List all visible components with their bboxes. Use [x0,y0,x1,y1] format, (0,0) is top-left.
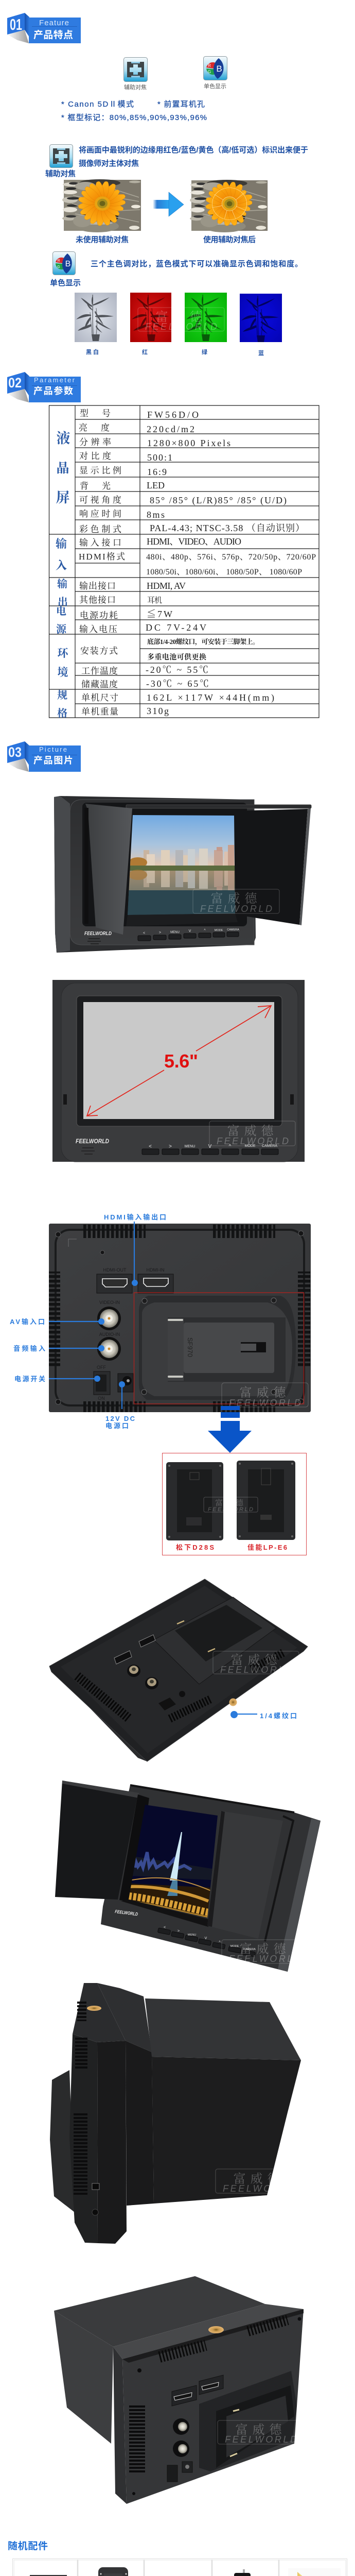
parameter names: 可视角度 [79,495,121,505]
parameter names: 显示比例 [79,466,121,476]
buttons [142,1149,278,1155]
photo: monitor with sunhood front view: FEELWORLD [84,931,112,937]
parameter values: 16:9 [147,467,167,477]
battery plate [199,2371,297,2471]
watermark: 富威德 [215,1498,246,1507]
icon: focus assist large [49,144,73,168]
watermark: FEELWORLD [229,1398,301,1408]
watermark: 富威德 [240,1942,290,1956]
parameter names: 单机重量 [81,707,118,717]
swatch labels [86,348,264,357]
tripod thread [208,2326,224,2333]
watermark [204,1497,258,1513]
icon: single colour large: B [65,260,70,268]
watermark: FEELWORLD [220,1665,292,1675]
single colour description: 三个主色调对比，蓝色模式下可以准确显示色调和饱和度。 [91,259,303,268]
BNC connectors [97,1300,121,1361]
watermark: FEELWORLD [145,321,217,332]
photo: monitor angled with sunhood open [55,1781,321,1972]
HDMI ports: HDMI-IN [146,1267,165,1273]
parameter names: 对比度 [79,451,111,461]
watermark: 富威德 [240,1386,290,1400]
group labels: 出 [58,596,68,608]
parameter values: DC 7V-24V [146,622,206,633]
HDMI ports: HDMI-OUT [103,1267,127,1273]
callout: HDMI input and output: HDMI输入输出口 [104,1213,166,1221]
photo: monitor with sunhood front view: MODE [215,929,223,932]
icon: single colour large [52,251,75,275]
parameter values: HDMI, AV [147,581,186,591]
swatch labels: 黑白 [86,348,99,355]
photo: monitor with sunhood front view: ^ [204,929,206,933]
watermark [218,2420,304,2445]
group labels: 源 [56,623,67,635]
parameter values: 162L ×117W ×44H(mm) [147,692,274,703]
parameter names: 其他接口 [79,595,116,605]
parameter values: 8ms [147,510,165,520]
callout: audio input [13,1345,104,1352]
icon: single colour display: B [216,64,222,74]
photo: before focus assist [62,179,141,232]
photo: monitor rear with annotated ports [49,1224,311,1412]
photo: monitor front with 5.6 inch diagonal: V [208,1144,212,1149]
group labels: 液 [57,431,70,446]
specification table [49,405,319,719]
photo: monitor rear with sunhood closed [54,2276,304,2504]
watermark [138,308,224,332]
focus assist description [79,145,308,168]
feature list: * Canon 5DⅡ模式 [61,100,134,109]
photo: monitor angled with sunhood open: V [205,1937,207,1940]
photo: monitor front with 5.6 inch diagonal: CAMERA [262,1144,277,1148]
rear ports [167,2375,223,2482]
icon label: single colour display: 单色显示 [204,82,226,90]
icon: single colour large: G [57,265,60,269]
arrow: screen diagonal [87,1006,271,1116]
watermark: 富威德 [211,892,261,906]
photo: monitor with sunhood front view [54,796,311,953]
power switch and DC jack: ON [98,1396,105,1401]
watermark: FEELWORLD [208,1506,253,1513]
panel: accessories table [12,2558,347,2576]
photo: monitor front with 5.6 inch diagonal [52,980,305,1162]
HDMI ports [97,1267,173,1293]
icon: single colour display: R [208,63,211,68]
callout: 1/4 thread [230,1711,297,1720]
callout: 12V DC power port [105,1381,135,1430]
photo: monitor front with 5.6 inch diagonal: MENU [185,1145,195,1148]
callout: power switch: 电源开关 [14,1375,45,1383]
plate: Panasonic D28S: 松下D28S [176,1544,214,1551]
swatch: blue [240,294,282,342]
parameter values: 500:1 [147,452,172,463]
callout: 12V DC power port: 电源口 [105,1422,129,1430]
parameter values: 480i、480p、576i、576p、720/50p、720/60P [146,553,316,562]
group labels: 电 [56,605,66,617]
plate: Canon LP-E6: 佳能LP-E6 [247,1544,287,1551]
photo: monitor with sunhood front view: V [189,929,191,933]
parameter names: 输入接口 [79,538,121,548]
parameter values: 220cd/m2 [147,424,194,434]
photo: after focus assist [190,180,268,232]
swatch: red [130,293,171,342]
plate: Panasonic D28S [166,1462,223,1551]
arrow: before to after [153,192,184,216]
parameter values: 多重电池可供更换 [147,653,206,662]
photo: monitor with sunhood front view: < [143,931,145,935]
watermark [209,1121,295,1146]
callout: audio input: 音频输入 [13,1345,45,1352]
watermark: FEELWORLD [200,904,272,914]
parameter names: 工作温度 [81,666,118,676]
parameter values: -30℃ ~ 65℃ [146,679,209,689]
section badge: 02 Parameter [7,372,81,402]
screen: city skyline [123,814,237,917]
parameter values: 1280×800 Pixels [147,438,230,448]
accessory: F970 plate [98,2567,128,2576]
section badge: 03 Picture [7,741,81,772]
parameter names: 输入电压 [79,624,117,634]
parameter names: 型号 [80,409,111,418]
photo: monitor with sunhood front view: MENU [170,931,180,934]
photo: monitor front with 5.6 inch diagonal: FEELWORLD [76,1138,109,1145]
watermark: 富威德 [227,1124,278,1138]
label: focus assist: 辅助对焦 [45,169,76,178]
arrow: battery plate options [208,1406,252,1453]
parameter names: 彩色制式 [79,524,121,534]
section badge: 03 Picture: Picture [39,745,67,753]
group labels: 环 [58,647,69,659]
parameter names: 背光 [80,481,111,491]
group labels: 入 [56,559,67,572]
buttons [138,932,239,941]
section badge: 03 Picture: 03 [8,744,22,760]
focus assist description: 将画面中最锐利的边缘用红色/蓝色/黄色（高/低可选）标识出来便于 [79,145,308,155]
buttons [157,1928,256,1957]
accessory: sunhood [21,2575,68,2576]
callout: AV input: AV输入口 [10,1318,45,1326]
photo: monitor angled with sunhood open: MODE [230,1945,239,1948]
group labels: 屏 [56,490,70,505]
parameter values: 1080/50i、1080/60i、 1080/50P、 1080/60P [146,568,302,577]
swatch labels: 红 [142,348,148,355]
parameter names: 亮度 [79,423,110,433]
callout: 1/4 thread: 1/4螺纹口 [260,1712,297,1720]
feature list: * 前置耳机孔 [157,100,205,109]
watermark: FEELWORLD [223,2183,295,2194]
watermark [213,1651,299,1675]
watermark [216,2169,303,2194]
battery plate: SF970 [186,1337,194,1357]
parameter values: LED [147,480,165,490]
section badge: 01 Feature [7,13,81,43]
watermark: 富威德 [234,2172,284,2186]
photo: monitor front with 5.6 inch diagonal: > [169,1144,172,1149]
power switch and DC jack: OFF [97,1365,106,1370]
parameter names: HDMI格式 [79,552,125,562]
red highlight frame [134,1293,304,1404]
parameter names: 电源功耗 [80,611,118,620]
photo: monitor angled with sunhood open: CAMERA [243,1948,256,1951]
photo: monitor with sunhood front view: > [159,931,161,935]
parameter names: 单机尺寸 [81,693,118,703]
parameter values: 310g [147,706,169,716]
BNC connectors: VIDEO-IN [99,1300,120,1305]
group labels: 境 [58,666,68,679]
group labels: 输 [57,578,67,590]
group labels: 晶 [56,461,69,476]
photo: monitor with sunhood front view: CAMERA [227,928,239,931]
parameter names: 储藏温度 [81,680,118,689]
photo: monitor angled with sunhood open: > [177,1929,180,1933]
photo: monitor angled with sunhood open: ^ [219,1941,221,1944]
watermark: 富威德 [236,2423,286,2437]
parameter values: ≦7W [147,609,172,619]
BNC connectors: AUDIO-IN [99,1332,120,1337]
parameter values: 耳机 [147,596,162,605]
caption: before: 未使用辅助对焦 [76,235,129,244]
watermark: 富威德 [230,1653,282,1667]
section badge: 02 Parameter: 产品参数 [33,385,73,396]
parameter values: 85° /85° (L/R)85° /85° (U/D) [150,495,287,506]
watermark [222,1383,308,1408]
photo: monitor front with 5.6 inch diagonal: MODE [245,1144,256,1148]
swatch: green [185,293,227,342]
parameter names: 响应时间 [79,509,121,519]
icon: single colour display: G [208,70,211,74]
icon label: focus assist: 辅助对焦 [124,83,147,91]
group labels [56,431,70,719]
photo: monitor angled with sunhood open: FEELWORLD [115,1909,138,1917]
photo: monitor front with 5.6 inch diagonal: < [149,1144,152,1149]
tripod thread [87,2006,101,2011]
accessory: hot shoe mount [234,2569,260,2576]
group labels: 规 [57,689,67,701]
section badge: 03 Picture: 产品图片 [33,755,73,766]
caption: after: 使用辅助对焦后 [203,235,256,244]
watermark: FEELWORLD [225,2434,297,2445]
feature list: * 框型标记：80%,85%,90%,93%,96% [61,113,207,122]
parameter values: -20℃ ~ 55℃ [146,665,208,675]
icon: focus assist [123,58,147,81]
battery plate [139,1296,296,1400]
power switch and DC jack [94,1365,133,1401]
swatch labels: 蓝 [258,350,264,357]
photo: monitor angled with sunhood open: MENU [188,1934,196,1937]
parameter values: PAL-4.43; NTSC-3.58 （自动识别） [150,523,305,533]
photo: monitor side view with sunhood closed [50,1983,303,2244]
section badge: 02 Parameter: Parameter [34,376,75,384]
callout: 12V DC power port: 12V DC [105,1415,135,1422]
icon: single colour large: R [57,259,60,263]
section badge: 01 Feature: 01 [10,15,22,33]
section badge: 01 Feature: 产品特点 [33,29,73,41]
icon: single colour display [204,57,227,80]
group labels: 输 [56,537,67,550]
swatch: black and white [75,293,117,342]
watermark: 富威德 [155,310,207,324]
parameter names: 分辨率 [79,437,111,447]
tripod thread [229,1698,237,1706]
watermark: FEELWORLD [217,1136,289,1146]
ports [114,1635,185,1710]
parameter names [79,409,125,717]
parameter names: 安装方式 [80,646,118,656]
photo: monitor rear angled with battery plate [49,1579,308,1761]
photo: monitor angled with sunhood open: < [164,1926,166,1929]
watermark [222,1940,308,1964]
callout: power switch [14,1375,100,1383]
focus assist description: 摄像师对主体对焦 [79,159,139,168]
parameter values: HDMI、VIDEO、AUDIO [147,536,241,547]
parameter names: 输出接口 [79,581,116,591]
callout: HDMI input and output [104,1213,166,1286]
group labels: 格 [57,707,67,719]
parameter values [146,410,316,716]
callout: AV input [10,1318,104,1326]
panel: battery plate options [163,1453,307,1555]
parameter values: FW56D/O [147,410,199,420]
heading: accessories: 随机配件 [8,2540,48,2552]
parameter values: 底部1/4-20螺纹口，可安装于三脚架上。 [147,638,259,646]
watermark [193,889,279,914]
section badge: 01 Feature: Feature [39,19,69,27]
swatch labels: 绿 [202,348,207,355]
diagonal size label: 5.6" [164,1050,198,1072]
plate: Canon LP-E6 [237,1461,295,1551]
label: single colour: 单色显示 [50,278,81,287]
photo: monitor front with 5.6 inch diagonal: ^ [229,1144,232,1149]
screen: night city [129,1805,218,1918]
accessory: manual folder [288,2568,341,2576]
feature list [61,100,207,122]
section badge: 02 Parameter: 02 [8,375,22,391]
side ports [92,2183,99,2215]
watermark: FEELWORLD [229,1954,301,1964]
